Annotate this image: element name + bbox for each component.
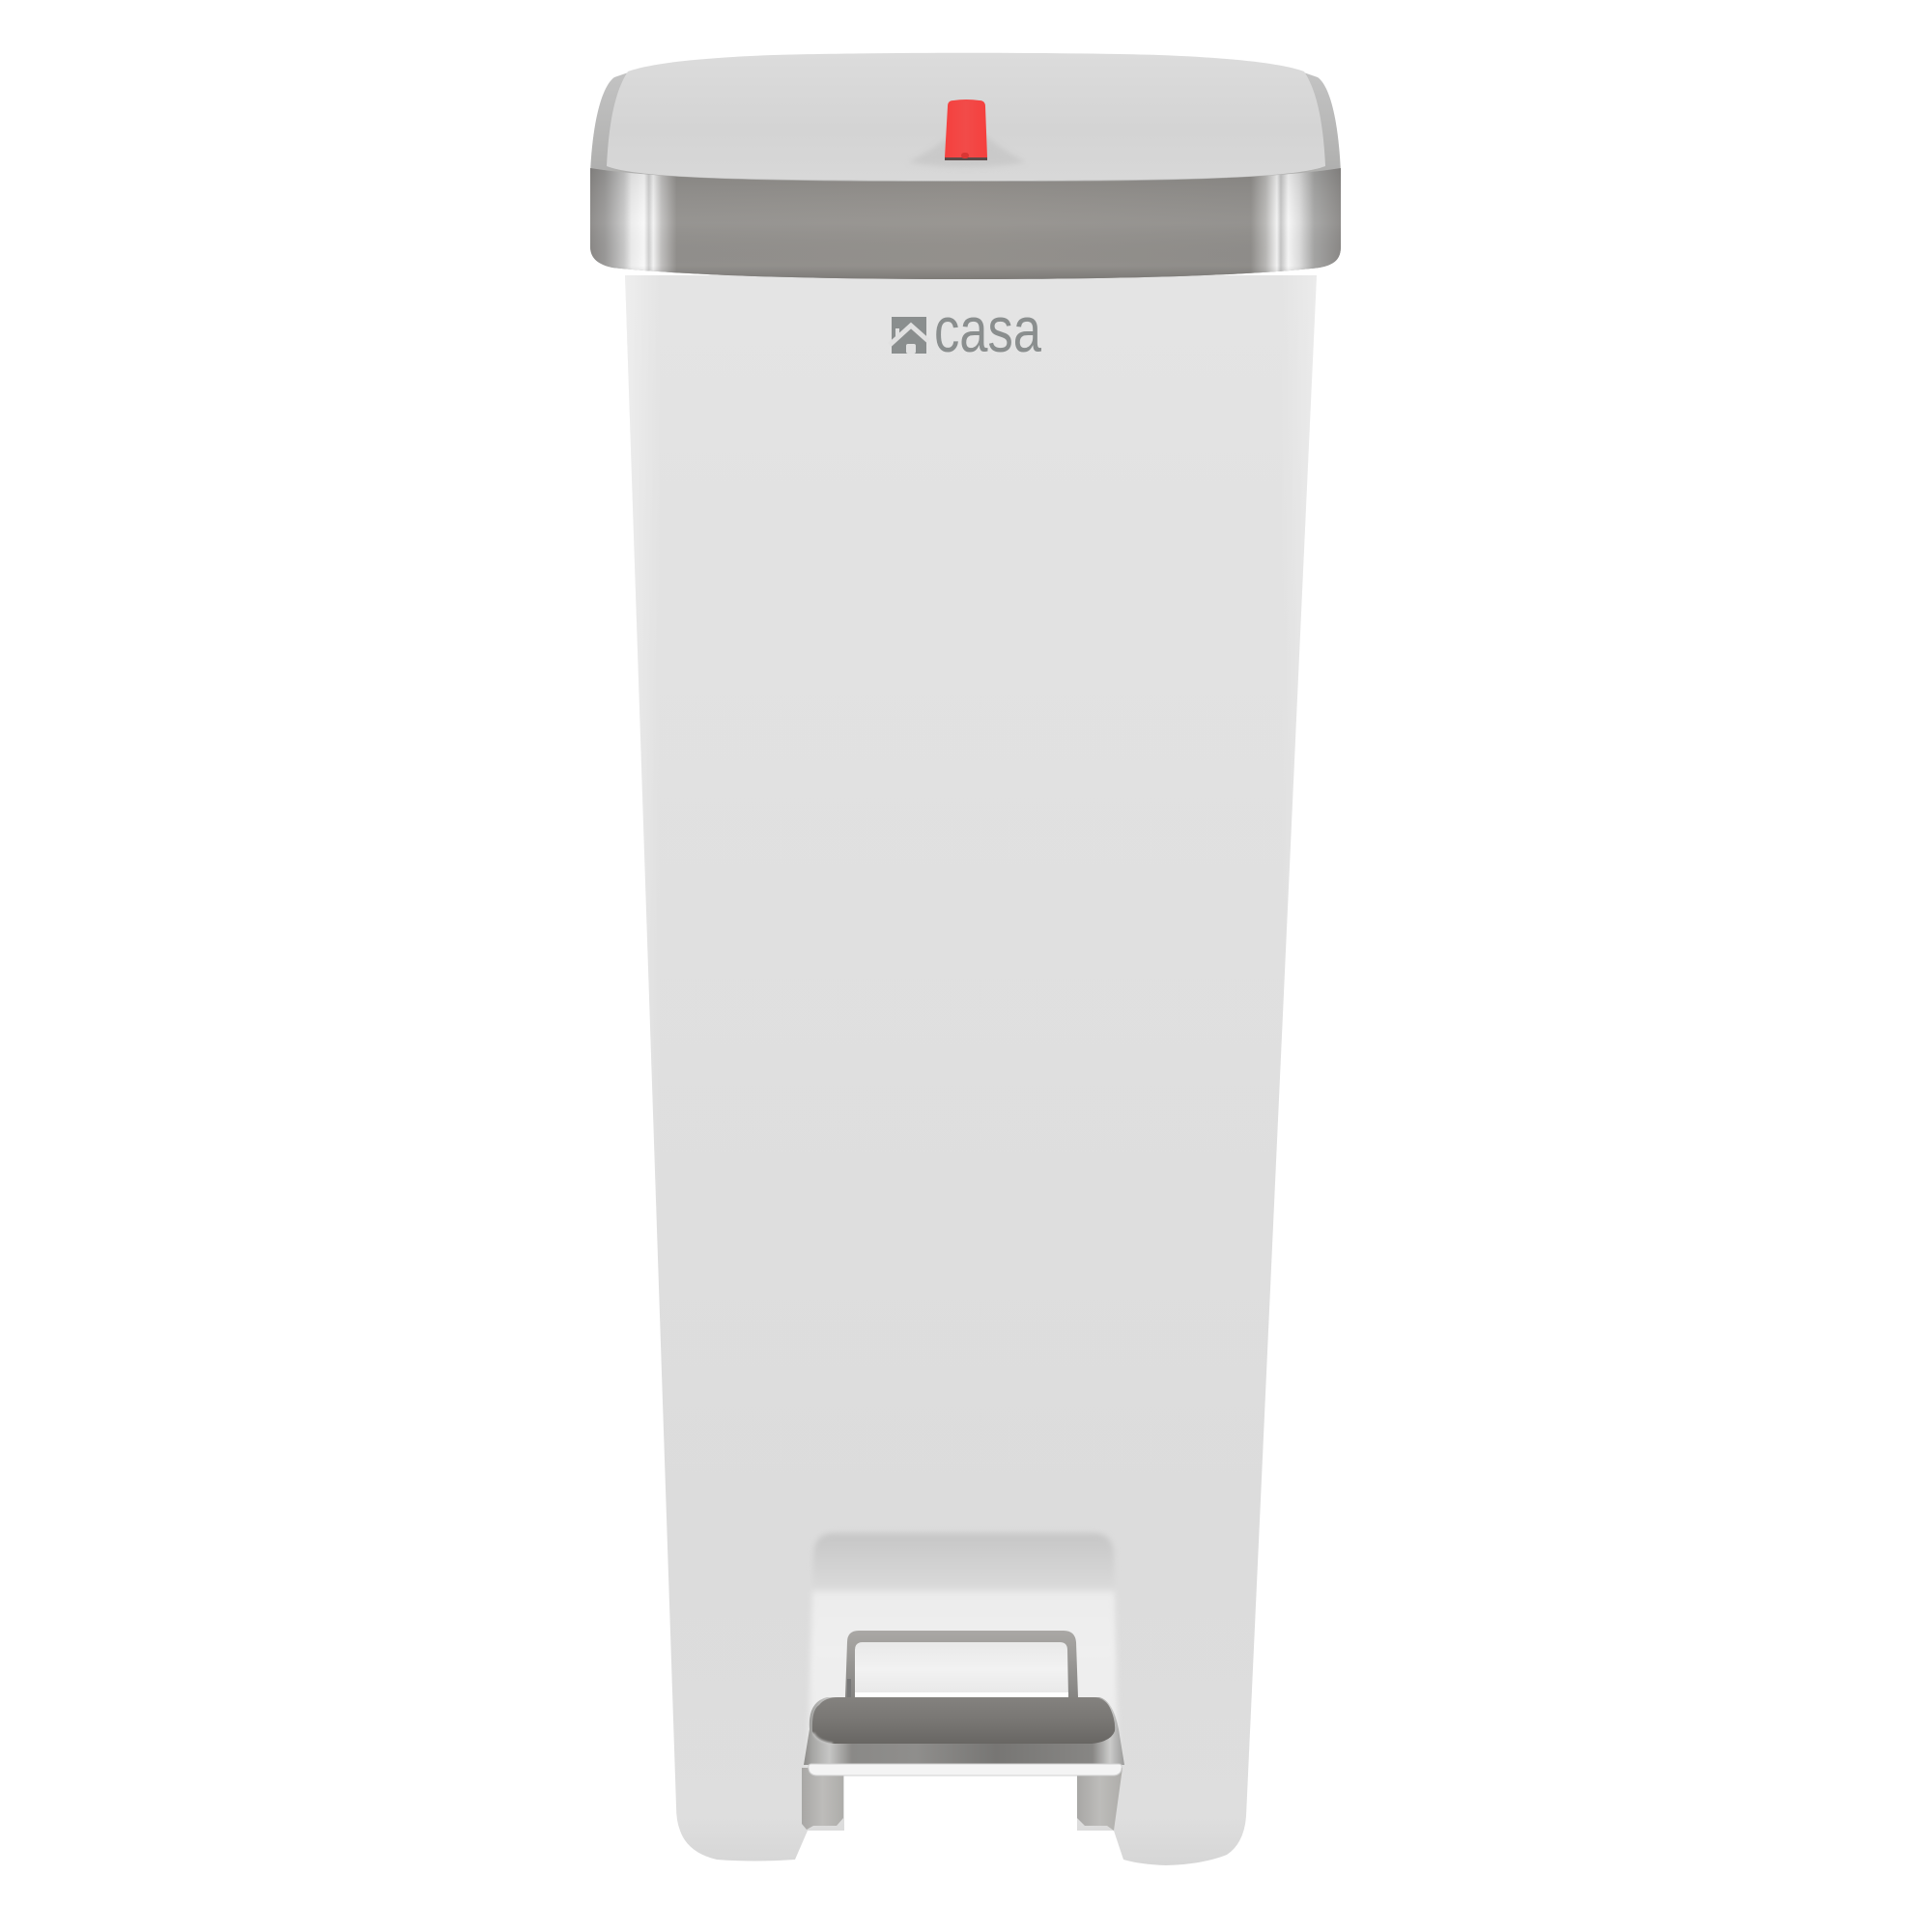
lid — [590, 53, 1341, 279]
bin body — [625, 275, 1317, 1865]
logo wordmark: casa — [934, 294, 1041, 365]
pedal bracket — [845, 1631, 1078, 1697]
lid top surface — [607, 53, 1325, 181]
pedal corner highlight — [813, 1733, 833, 1744]
pedal recess — [808, 1533, 1119, 1833]
pedal white lip — [809, 1764, 1122, 1776]
casa logo — [890, 294, 1041, 365]
pedal plate top — [812, 1697, 1115, 1744]
lid shadow around tab — [908, 133, 1026, 167]
pedal assembly — [802, 1631, 1124, 1831]
red tab — [945, 99, 987, 160]
bracket pivot — [847, 1679, 851, 1697]
pedal plate front — [804, 1697, 1124, 1765]
logo icon: house — [890, 317, 928, 354]
lid metal band — [590, 68, 1341, 279]
pedal legs — [802, 1768, 1122, 1831]
pedal white strip behind — [855, 1692, 1068, 1697]
